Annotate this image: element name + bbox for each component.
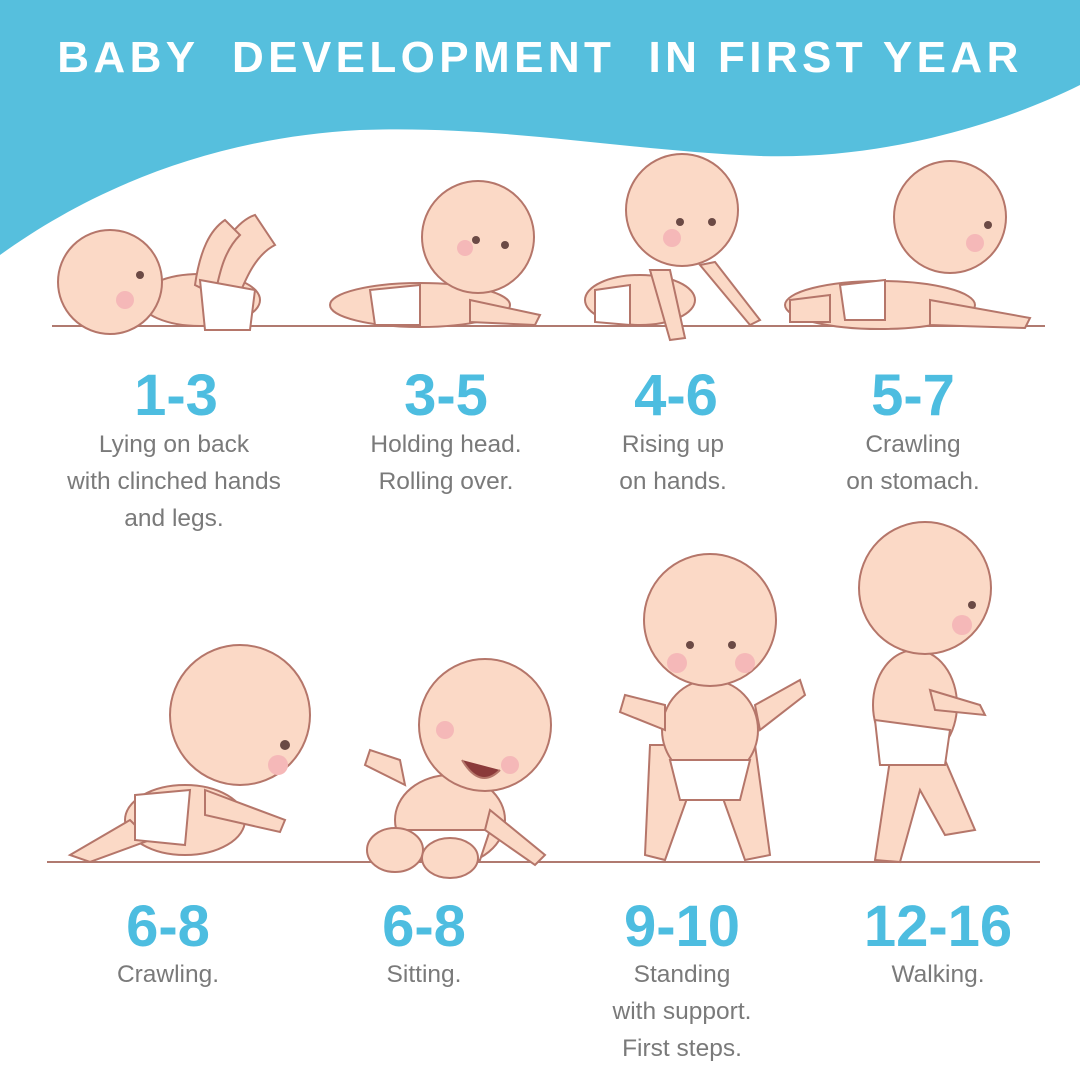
numbers and captions: with clinched hands bbox=[66, 468, 281, 495]
numbers and captions: Rising up bbox=[622, 431, 724, 458]
numbers and captions: 6-8 bbox=[382, 894, 466, 959]
numbers and captions: on hands. bbox=[619, 468, 727, 495]
baby 3: rising up on hands bbox=[585, 154, 760, 340]
numbers and captions: and legs. bbox=[124, 505, 224, 532]
numbers and captions: 4-6 bbox=[634, 363, 718, 428]
baby 5: crawling bbox=[70, 645, 310, 862]
numbers and captions: First steps. bbox=[622, 1035, 742, 1062]
baby 4: crawling on stomach bbox=[785, 161, 1030, 329]
numbers and captions: Crawling. bbox=[117, 961, 219, 988]
numbers and captions bbox=[66, 363, 1012, 1062]
numbers and captions: 5-7 bbox=[871, 363, 955, 428]
numbers and captions: 6-8 bbox=[126, 894, 210, 959]
baby 1: lying on back bbox=[58, 215, 275, 334]
numbers and captions: Holding head. bbox=[370, 431, 522, 458]
numbers and captions: Sitting. bbox=[387, 961, 461, 988]
header wave bbox=[0, 0, 1080, 255]
numbers and captions: Walking. bbox=[891, 961, 985, 988]
title: BABY DEVELOPMENT IN FIRST YEAR bbox=[57, 33, 1023, 82]
numbers and captions: Crawling bbox=[865, 431, 961, 458]
numbers and captions: 9-10 bbox=[624, 894, 740, 959]
numbers and captions: on stomach. bbox=[846, 468, 980, 495]
numbers and captions: 12-16 bbox=[864, 894, 1012, 959]
baby 8: walking bbox=[859, 522, 991, 862]
baby 2: holding head bbox=[330, 181, 540, 327]
numbers and captions: with support. bbox=[612, 998, 751, 1025]
numbers and captions: 3-5 bbox=[404, 363, 488, 428]
numbers and captions: Lying on back bbox=[99, 431, 250, 458]
baby 6: sitting bbox=[365, 659, 551, 878]
numbers and captions: Standing bbox=[634, 961, 730, 988]
baby 7: standing bbox=[620, 554, 805, 860]
numbers and captions: 1-3 bbox=[134, 363, 218, 428]
numbers and captions: Rolling over. bbox=[379, 468, 513, 495]
